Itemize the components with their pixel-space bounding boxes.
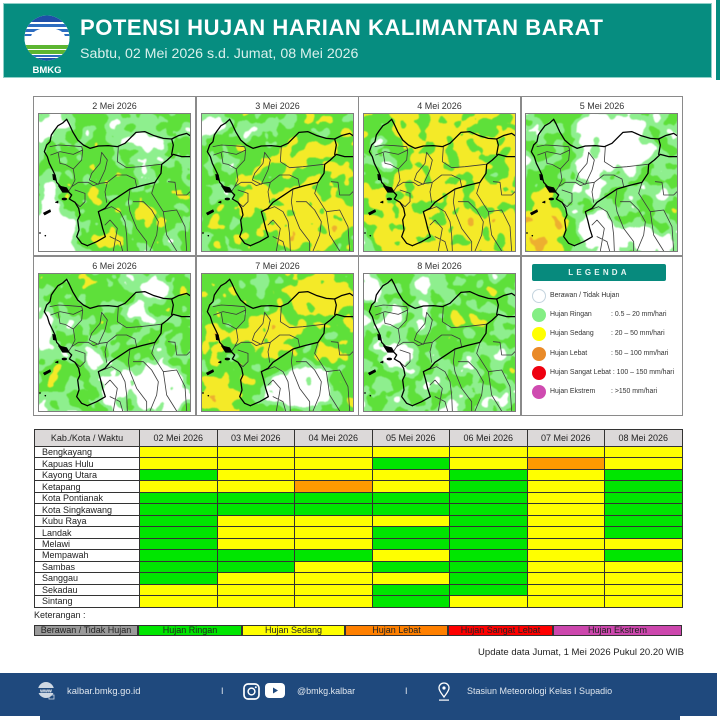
table header: 05 Mei 2026 bbox=[386, 433, 436, 443]
row: Kayong Utara: Kayong Utara bbox=[42, 470, 97, 480]
row: Melawi bbox=[42, 539, 682, 549]
row: Sanggau: Sanggau bbox=[42, 573, 78, 583]
key: ekstrem: Hujan Ekstrem bbox=[588, 625, 647, 635]
rainfall map bbox=[202, 114, 353, 251]
social handle: @bmkg.kalbar bbox=[297, 686, 355, 696]
legend: ekstrem: : >150 mm/hari bbox=[611, 388, 657, 395]
panel: map 7 Mei 2026 bbox=[196, 256, 359, 416]
key: lebat: Hujan Lebat bbox=[372, 625, 421, 635]
website text: kalbar.bmkg.go.id bbox=[67, 685, 140, 696]
separator: I bbox=[221, 686, 224, 696]
rainfall table bbox=[34, 429, 683, 608]
row: Landak: Landak bbox=[42, 528, 72, 538]
legend: ringan: Hujan Ringan bbox=[550, 311, 592, 318]
map label: 7 Mei 2026 bbox=[255, 261, 300, 271]
table header: 03 Mei 2026 bbox=[231, 433, 281, 443]
panel: map 2 Mei 2026 bbox=[33, 96, 196, 256]
rainfall map bbox=[39, 114, 190, 251]
icon: website globe bbox=[38, 682, 54, 700]
map label: 6 Mei 2026 bbox=[92, 261, 137, 271]
row: Ketapang bbox=[42, 481, 682, 492]
legend: ekstrem: Hujan Ekstrem bbox=[550, 388, 595, 395]
update note: Update data Jumat, 1 Mei 2026 Pukul 20.20 WIB bbox=[478, 647, 684, 658]
row: Kota Pontianak bbox=[42, 493, 682, 503]
panel: map 8 Mei 2026 bbox=[358, 256, 521, 416]
legend: sedang bbox=[532, 327, 665, 341]
icon: youtube bbox=[265, 683, 285, 698]
keterangan label: Keterangan : bbox=[34, 610, 86, 620]
icon: website globe: www bbox=[39, 688, 52, 694]
row: Bengkayang: Bengkayang bbox=[42, 447, 92, 457]
row: Sanggau bbox=[42, 573, 682, 584]
rainfall map bbox=[39, 274, 190, 411]
map label: 4 Mei 2026 bbox=[417, 101, 462, 111]
row: Bengkayang bbox=[42, 447, 682, 457]
legend: sedang: : 20 – 50 mm/hari bbox=[611, 330, 665, 337]
row: Sambas: Sambas bbox=[42, 562, 75, 572]
row: Mempawah bbox=[42, 550, 682, 561]
legend: sedang: Hujan Sedang bbox=[550, 330, 594, 337]
icon: location pin bbox=[438, 682, 450, 701]
rainfall map bbox=[364, 274, 515, 411]
map label: 3 Mei 2026 bbox=[255, 101, 300, 111]
footer lower strip bbox=[40, 716, 680, 720]
table header bbox=[35, 430, 682, 607]
map label: 5 Mei 2026 bbox=[580, 101, 624, 111]
key: berawan: Berawan / Tidak Hujan bbox=[41, 625, 131, 635]
row: Kota Singkawang: Kota Singkawang bbox=[42, 505, 112, 515]
key: sedang bbox=[242, 625, 345, 636]
row: Sintang: Sintang bbox=[42, 596, 73, 606]
panel: map 6 Mei 2026 bbox=[33, 256, 196, 416]
row: Sekadau: Sekadau bbox=[42, 585, 78, 595]
table header: 08 Mei 2026 bbox=[618, 433, 668, 443]
right edge strip bbox=[716, 0, 720, 80]
title: POTENSI HUJAN HARIAN KALIMANTAN BARAT bbox=[80, 15, 603, 40]
panel: map 5 Mei 2026 bbox=[521, 96, 683, 256]
row: Mempawah: Mempawah bbox=[42, 550, 89, 560]
row: Kota Pontianak: Kota Pontianak bbox=[42, 493, 103, 503]
legend: ringan bbox=[532, 308, 667, 322]
row: Melawi: Melawi bbox=[42, 539, 70, 549]
row: Kubu Raya bbox=[42, 516, 682, 526]
legend: sangat lebat: Hujan Sangat Lebat : 100 – 150 mm/hari bbox=[550, 369, 674, 376]
legend: lebat bbox=[532, 347, 668, 361]
key: sangat lebat bbox=[448, 625, 553, 636]
legend: berawan bbox=[532, 289, 619, 303]
rainfall map bbox=[202, 274, 353, 411]
legend: ringan: : 0.5 – 20 mm/hari bbox=[611, 311, 667, 318]
keterangan colour bar bbox=[34, 625, 682, 636]
legend heading: LEGENDA bbox=[568, 268, 630, 277]
rainfall map bbox=[364, 114, 515, 251]
legend: lebat: Hujan Lebat bbox=[550, 350, 587, 357]
panel: legend bbox=[521, 256, 683, 416]
key: sangat lebat: Hujan Sangat Lebat bbox=[461, 625, 540, 635]
row: Sambas bbox=[42, 562, 682, 572]
legend: lebat: : 50 – 100 mm/hari bbox=[611, 350, 668, 357]
map label: 8 Mei 2026 bbox=[417, 261, 462, 271]
table header: 02 Mei 2026 bbox=[153, 433, 203, 443]
row: Kapuas Hulu: Kapuas Hulu bbox=[42, 459, 94, 469]
legend heading bbox=[532, 264, 666, 281]
legend: sangat lebat bbox=[532, 366, 674, 380]
row: Kota Singkawang bbox=[42, 504, 682, 515]
panel: map 4 Mei 2026 bbox=[358, 96, 521, 256]
header banner bbox=[4, 4, 711, 77]
key: ringan bbox=[138, 625, 242, 636]
panel: map 3 Mei 2026 bbox=[196, 96, 359, 256]
row: Kayong Utara bbox=[42, 470, 682, 480]
map label: 2 Mei 2026 bbox=[92, 101, 137, 111]
icon: instagram bbox=[243, 683, 260, 700]
key: ringan: Hujan Ringan bbox=[163, 625, 217, 635]
key: sedang: Hujan Sedang bbox=[265, 625, 322, 635]
row: Kubu Raya: Kubu Raya bbox=[42, 516, 87, 526]
table header: 06 Mei 2026 bbox=[463, 433, 513, 443]
station text: Stasiun Meteorologi Kelas I Supadio bbox=[467, 686, 612, 696]
key: ekstrem bbox=[553, 625, 682, 636]
subtitle: Sabtu, 02 Mei 2026 s.d. Jumat, 08 Mei 2026 bbox=[80, 46, 358, 62]
legend: berawan: Berawan / Tidak Hujan bbox=[550, 292, 619, 299]
footer bar bbox=[0, 673, 717, 716]
separator: I bbox=[405, 686, 408, 696]
row: Kapuas Hulu bbox=[42, 458, 682, 469]
rainfall map bbox=[526, 114, 677, 251]
row: Sekadau bbox=[42, 585, 682, 595]
row: Sintang bbox=[42, 596, 682, 607]
row: Landak bbox=[42, 527, 682, 538]
table header: Kab./Kota / Waktu bbox=[51, 433, 123, 443]
row: Ketapang: Ketapang bbox=[42, 482, 81, 492]
table header: 07 Mei 2026 bbox=[541, 433, 591, 443]
icon: BMKG logo bbox=[24, 16, 70, 75]
table header: 04 Mei 2026 bbox=[308, 433, 358, 443]
key: lebat bbox=[345, 625, 448, 636]
legend: ekstrem bbox=[532, 385, 657, 399]
